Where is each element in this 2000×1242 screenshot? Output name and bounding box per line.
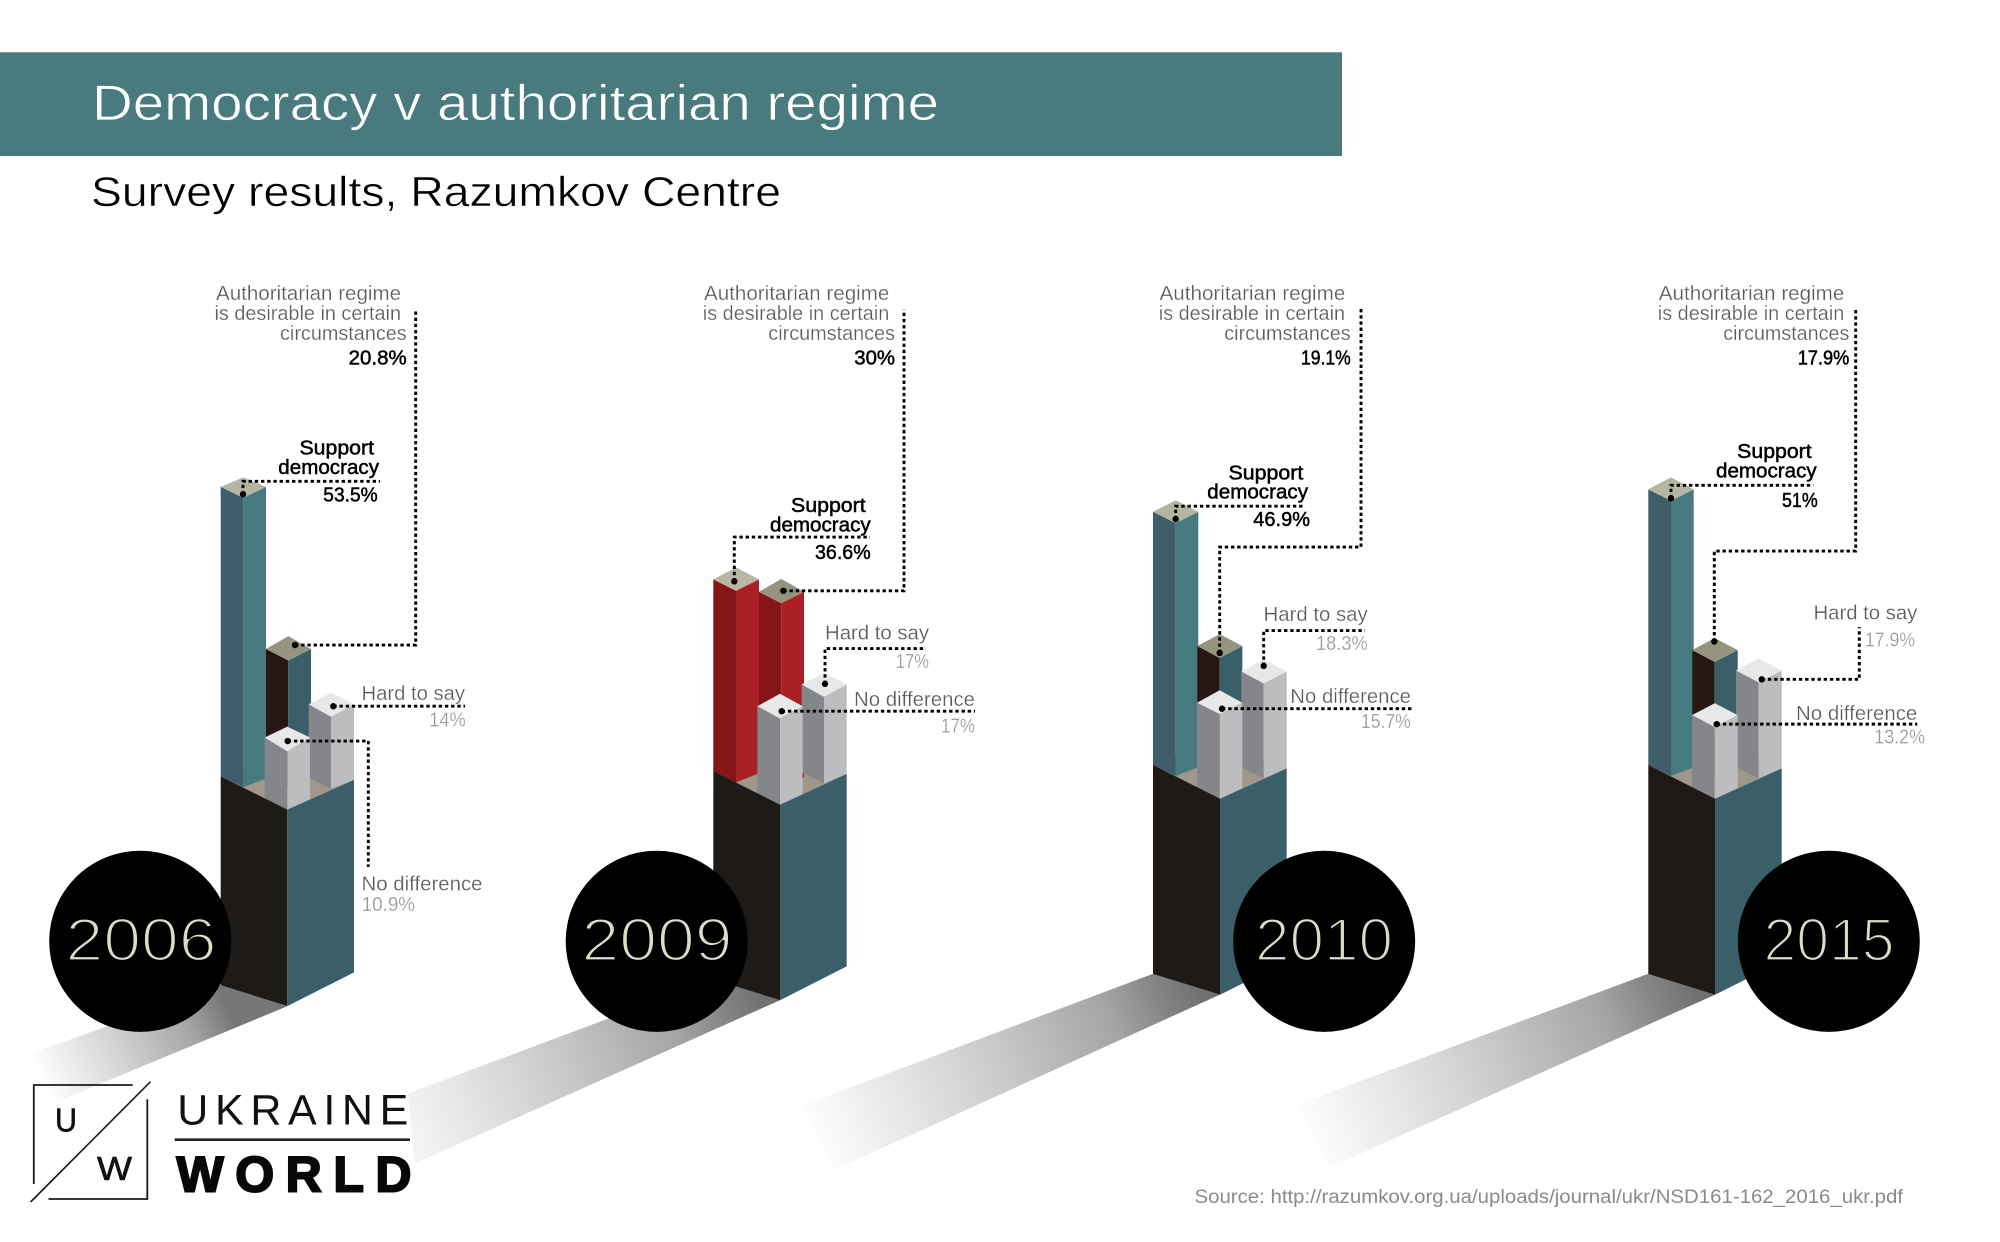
logo wordmark [175,1086,412,1203]
logo wordmark: UKRAINE [177,1086,408,1134]
subtitle: Survey results, Razumkov Centre [91,168,781,215]
label: authoritarian 2006: Authoritarian regime [216,283,401,305]
bar: authoritarian regime 30% [759,579,804,787]
bar: hard to say 18.3% [1241,659,1287,778]
label: authoritarian 2010: 19.1% [1301,348,1351,370]
label: authoritarian 2006 [214,283,407,370]
label: support democracy 2009: 36.6% [815,542,871,564]
label: support democracy 2006: Support [300,438,374,460]
leader lines 2015 [1668,310,1917,727]
label: support democracy 2009: democracy [770,515,871,537]
label: hard to say 2006 [362,683,466,732]
label: hard to say 2010: Hard to say [1264,604,1368,626]
label: authoritarian 2009: 30% [854,348,895,370]
label: authoritarian 2010: Authoritarian regime [1160,283,1345,305]
bar: authoritarian regime 20.8% [266,636,311,787]
label: authoritarian 2009: Authoritarian regime [704,283,889,305]
label: hard to say 2006: Hard to say [362,683,465,705]
label: hard to say 2015: 17.9% [1865,630,1915,652]
column chart 2009 [566,310,975,1032]
label: hard to say 2010: 18.3% [1316,633,1368,655]
year badge 2009 [566,851,748,1032]
bar: support democracy 51% [1648,477,1694,776]
bar: authoritarian regime 17.9% [1692,638,1738,777]
label: support democracy 2009 [770,495,871,564]
shadow 2009 [408,979,780,1164]
label: authoritarian 2010: is desirable in certain [1159,303,1345,325]
bar: no difference 15.7% [1197,690,1242,800]
title band [0,52,1342,156]
leader lines 2006 [240,310,465,867]
label: no difference 2015: No difference [1796,703,1917,725]
year badge 2010 [1233,851,1415,1032]
base block [1153,765,1287,995]
column chart 2006 [49,310,465,1032]
label: no difference 2010: No difference [1290,686,1411,708]
label: support democracy 2015: 51% [1782,490,1818,512]
label: authoritarian 2015: is desirable in certain [1658,303,1844,325]
label: hard to say 2006: 14% [429,710,466,732]
leader lines 2009 [731,310,975,714]
base block [1648,765,1782,995]
year 2010: 2010 [1255,906,1393,973]
shadow 2010 [801,974,1220,1170]
column chart 2015 [1648,310,1920,1032]
label: authoritarian 2009: circumstances [768,323,895,345]
label: hard to say 2009: 17% [896,651,929,673]
year 2006: 2006 [66,906,216,973]
label: no difference 2006: No difference [362,874,482,896]
label: authoritarian 2009: is desirable in certain [703,303,889,325]
bar: no difference 10.9% [265,727,310,811]
logo mark [31,1082,151,1202]
label: authoritarian 2009 [703,283,895,370]
logo: Ukraine World [31,1082,411,1203]
panel: 2010 [801,283,1415,1170]
logo wordmark: WORLD [176,1147,412,1203]
column chart 2010 [1153,307,1415,1032]
label: support democracy 2009: Support [791,495,866,517]
shadow 2006 [32,985,287,1102]
label: authoritarian 2010 [1159,283,1351,370]
label: support democracy 2015 [1716,441,1818,512]
label: authoritarian 2015: 17.9% [1798,348,1849,370]
panel: 2015 [1297,283,1925,1168]
bar: no difference 13.2% [1692,703,1738,800]
label: hard to say 2015: Hard to say [1814,603,1917,625]
label: authoritarian 2015: circumstances [1723,323,1849,345]
bar: hard to say 17.9% [1736,658,1782,778]
label: support democracy 2010: 46.9% [1253,509,1310,531]
label: support democracy 2015: democracy [1716,460,1817,482]
label: no difference 2009: 17% [941,716,975,738]
label: no difference 2006 [362,874,482,916]
shadow 2015 [1297,974,1715,1168]
label: hard to say 2009: Hard to say [825,622,929,644]
bar: support democracy 46.9% [1153,500,1198,776]
label: authoritarian 2010: circumstances [1224,323,1351,345]
panel: 2006 [32,283,482,1102]
label: authoritarian 2006: 20.8% [349,348,407,370]
bar: support democracy 53.5% [221,477,266,787]
panel: 2009 [408,283,975,1164]
year 2009: 2009 [582,906,732,973]
label: authoritarian 2015: Authoritarian regime [1659,283,1844,305]
label: authoritarian 2015 [1658,283,1849,370]
label: no difference 2010 [1290,686,1411,733]
label: support democracy 2006: democracy [278,457,379,479]
label: support democracy 2010 [1207,462,1310,531]
logo mark: U [55,1102,77,1139]
label: hard to say 2015 [1814,603,1917,652]
label: no difference 2010: 15.7% [1361,711,1411,733]
label: hard to say 2010 [1264,604,1368,655]
label: support democracy 2006: 53.5% [323,484,378,506]
bar: support democracy 36.6% [713,567,759,782]
title: Democracy v authoritarian regime [92,75,939,131]
label: support democracy 2010: democracy [1207,481,1308,503]
logo mark: W [97,1150,133,1187]
label: support democracy 2015: Support [1737,441,1812,463]
year badge 2006 [49,851,231,1032]
label: no difference 2009 [854,689,975,738]
label: no difference 2009: No difference [854,689,975,711]
bar: hard to say 17% [802,673,847,783]
bar: authoritarian regime 19.1% [1197,634,1242,777]
label: no difference 2015: 13.2% [1874,726,1925,748]
label: support democracy 2006 [278,438,379,506]
label: no difference 2015 [1796,703,1925,748]
bar: hard to say 14% [309,693,354,789]
base block [221,776,354,1006]
year badge 2015 [1738,851,1920,1032]
bar: no difference 17% [757,694,803,806]
year 2015: 2015 [1764,906,1894,973]
label: no difference 2006: 10.9% [362,894,415,916]
leader lines 2010 [1172,307,1412,712]
label: hard to say 2009 [825,622,929,673]
label: support democracy 2010: Support [1228,462,1304,484]
base block [713,771,847,1000]
label: authoritarian 2006: circumstances [280,323,407,345]
source note: Source: http://razumkov.org.ua/uploads/journal/ukr/NSD161-162_2016_ukr.pdf [1194,1187,1904,1208]
label: authoritarian 2006: is desirable in certain [214,303,401,325]
